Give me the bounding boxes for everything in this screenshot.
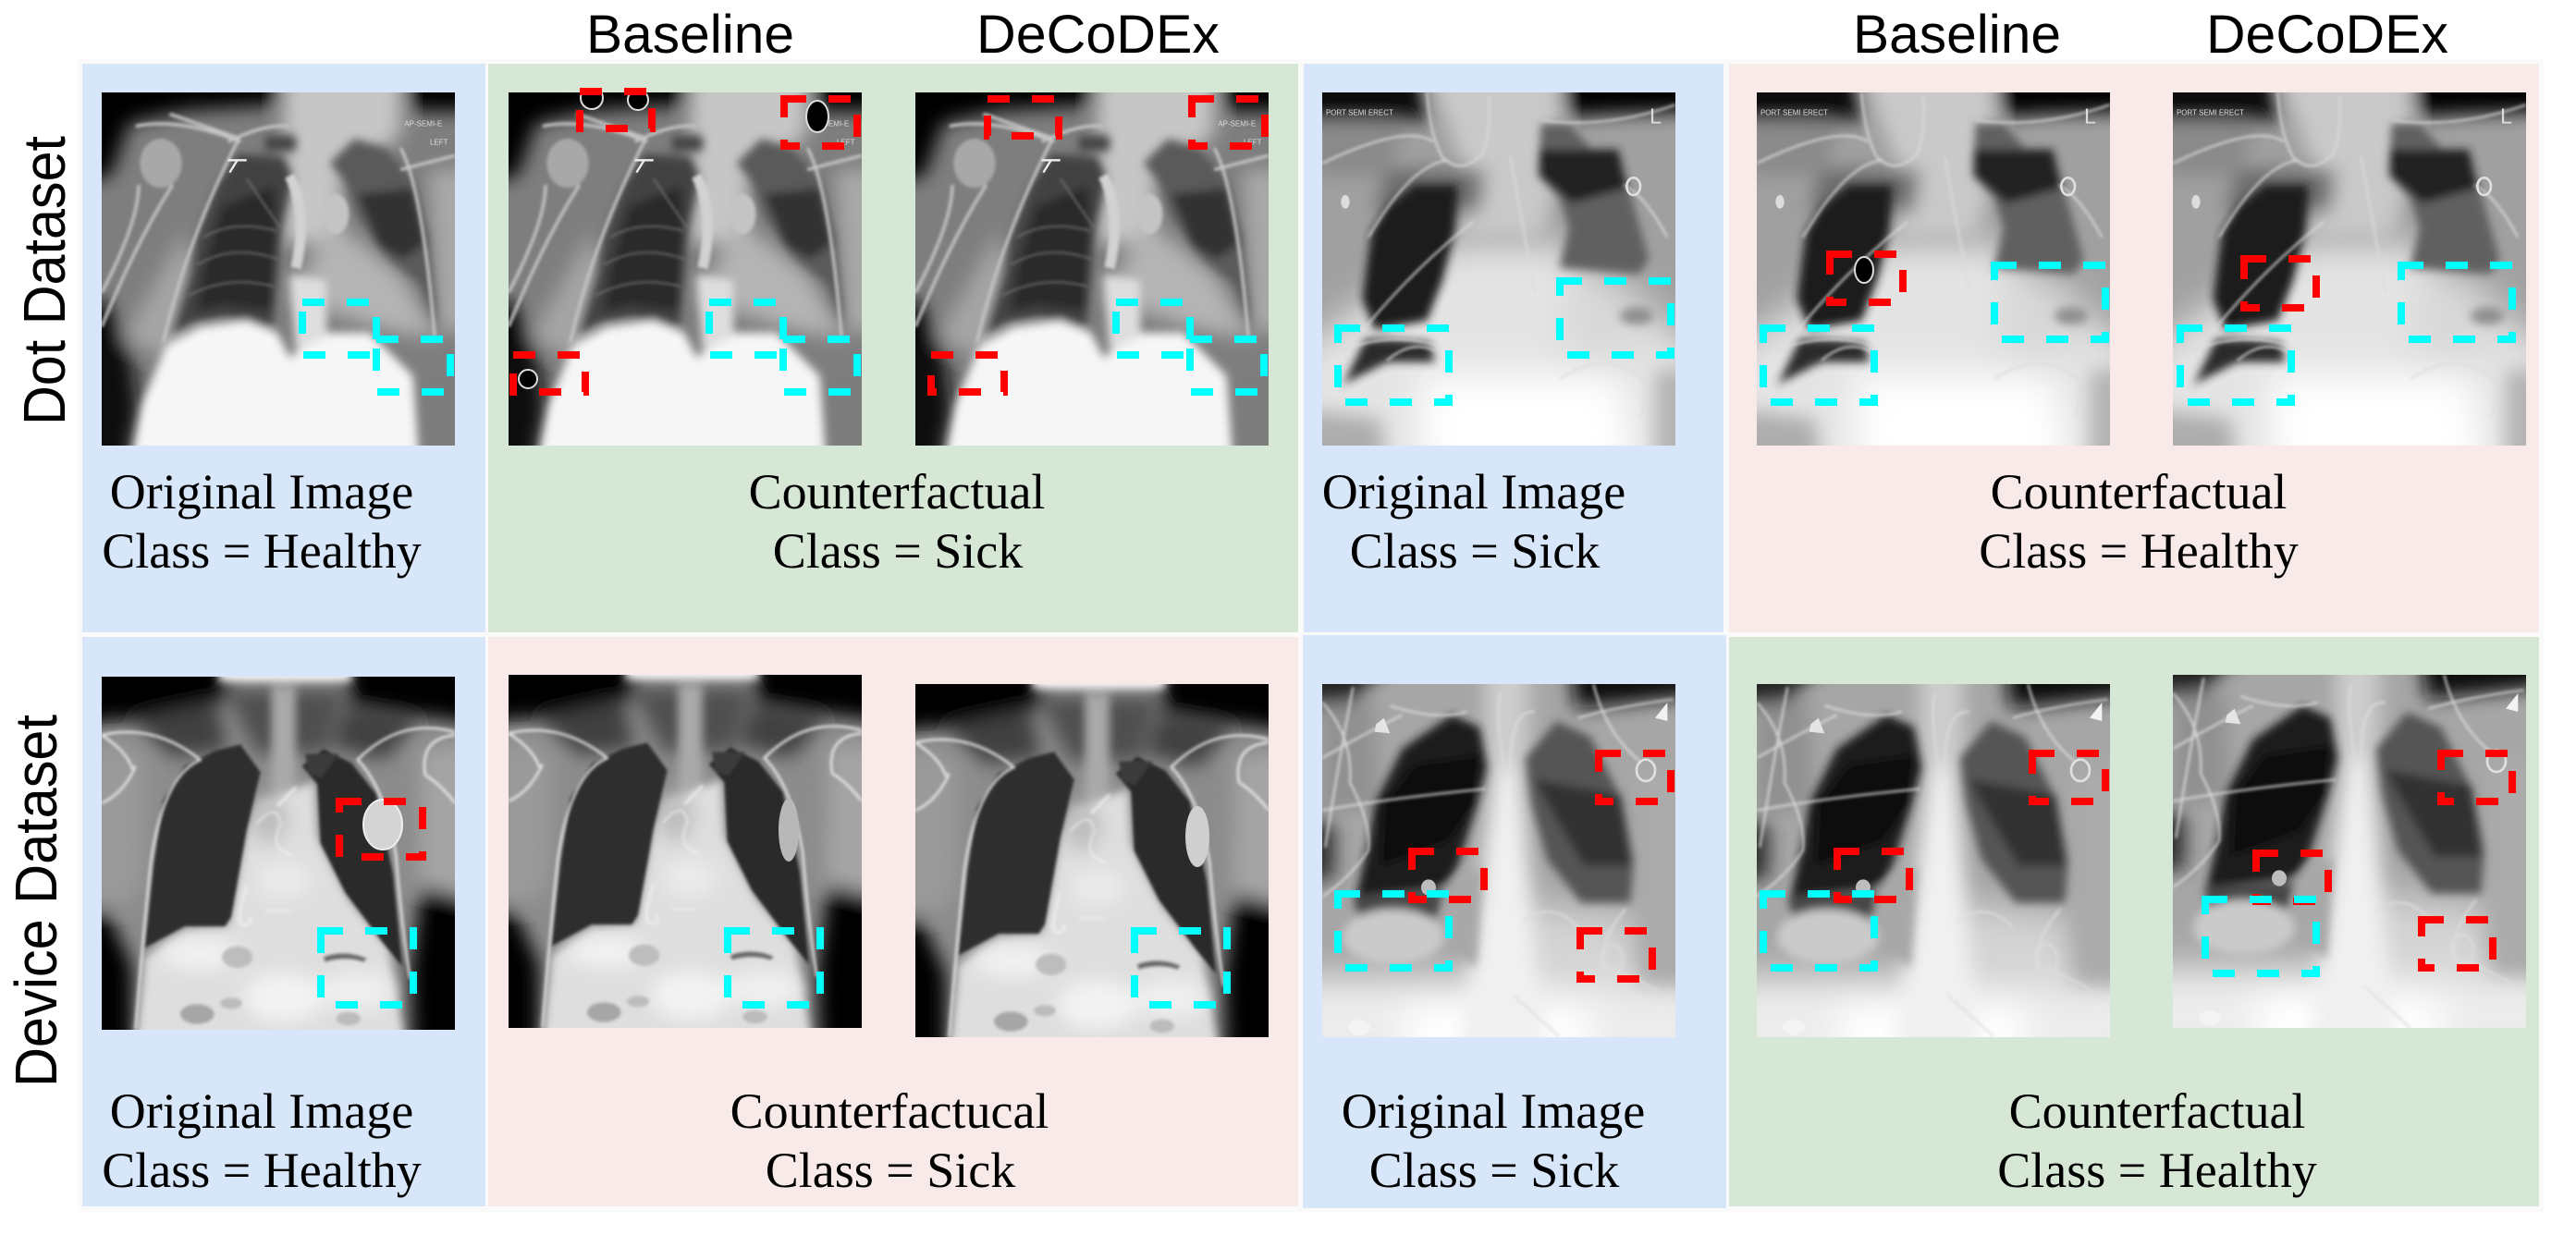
caption: counterfactual healthy: Class = Healthy bbox=[1997, 1143, 2317, 1198]
caption: counterfactual healthy bbox=[1979, 464, 2299, 579]
caption: counterfactual healthy: Counterfactual bbox=[1991, 464, 2287, 520]
caption: original image healthy bbox=[102, 1083, 422, 1198]
x-ray: original healthy chest with device bbox=[102, 677, 455, 1030]
column heading: Baseline, left: Baseline bbox=[586, 5, 794, 65]
x-ray: DeCoDEx counterfactual bbox=[915, 92, 1269, 446]
caption: original image sick: Class = Sick bbox=[1350, 523, 1600, 579]
annotation boxes: cyan regions bbox=[302, 302, 450, 392]
annotation boxes: baseline bbox=[1763, 254, 2105, 402]
x-ray: baseline counterfactual bbox=[1757, 684, 2110, 1037]
panel: dot dataset counterfactual healthy bbox=[1717, 53, 2564, 632]
caption: counterfactual sick: Counterfactucal bbox=[730, 1083, 1049, 1139]
panel: dot dataset original sick bbox=[1282, 53, 1723, 632]
caption: counterfactual sick: Class = Sick bbox=[773, 523, 1023, 579]
caption: counterfactual sick: Counterfactual bbox=[749, 464, 1045, 520]
caption: original image sick bbox=[1342, 1083, 1645, 1198]
x-ray: DeCoDEx counterfactual bbox=[915, 684, 1269, 1037]
caption: counterfactual healthy: Counterfactual bbox=[2009, 1083, 2305, 1139]
caption: counterfactual sick bbox=[730, 1083, 1049, 1198]
caption: original image healthy: Class = Healthy bbox=[102, 523, 422, 579]
caption: original image sick: Original Image bbox=[1342, 1083, 1645, 1139]
x-ray: baseline counterfactual bbox=[509, 675, 862, 1028]
caption: counterfactual sick: Class = Sick bbox=[766, 1143, 1015, 1198]
x-ray: original sick chest bbox=[1322, 684, 1675, 1037]
annotation boxes bbox=[728, 931, 1227, 1005]
x-ray: DeCoDEx counterfactual bbox=[2173, 675, 2526, 1028]
x-ray: baseline counterfactual with dot artifacts bbox=[509, 92, 862, 446]
caption: original image healthy: Original Image bbox=[110, 464, 413, 520]
annotation boxes: DeCoDEx bbox=[2180, 259, 2512, 402]
row label: Dot Dataset: Dot Dataset bbox=[11, 136, 78, 425]
annotation boxes bbox=[1338, 753, 1671, 979]
panel: device dataset original sick bbox=[1282, 635, 1726, 1208]
annotation boxes: cyan regions bbox=[1338, 281, 1671, 402]
annotation boxes bbox=[321, 801, 423, 1005]
caption: counterfactual healthy: Class = Healthy bbox=[1979, 523, 2299, 579]
caption: original image healthy: Original Image bbox=[110, 1083, 413, 1139]
caption: original image sick: Class = Sick bbox=[1369, 1143, 1619, 1198]
annotation boxes: baseline bbox=[513, 92, 857, 392]
caption: original image healthy bbox=[102, 464, 422, 579]
caption: counterfactual sick bbox=[749, 464, 1045, 579]
caption: original image healthy: Class = Healthy bbox=[102, 1143, 422, 1198]
panel: dot dataset counterfactual sick bbox=[469, 53, 1306, 632]
row label: Device Dataset: Device Dataset bbox=[3, 715, 69, 1087]
x-ray: original sick chest bbox=[1322, 92, 1675, 446]
x-ray: baseline counterfactual with dot artifact bbox=[1757, 92, 2110, 446]
annotation boxes: DeCoDEx bbox=[931, 99, 1265, 392]
annotation boxes: DeCoDEx bbox=[2205, 753, 2512, 973]
panel: device dataset original healthy bbox=[62, 637, 493, 1206]
panel: device dataset counterfactual sick bbox=[469, 637, 1306, 1206]
column heading: Baseline, right: Baseline bbox=[1853, 5, 2061, 65]
panel: dot dataset original healthy bbox=[62, 53, 493, 632]
caption: original image sick bbox=[1322, 464, 1625, 579]
x-ray: original healthy chest bbox=[102, 92, 455, 446]
column heading: DeCoDEx, right: DeCoDEx bbox=[2206, 5, 2448, 65]
annotation boxes: baseline bbox=[1763, 753, 2105, 968]
caption: counterfactual healthy bbox=[1997, 1083, 2317, 1198]
caption: original image sick: Original Image bbox=[1322, 464, 1625, 520]
column heading: DeCoDEx, left: DeCoDEx bbox=[976, 5, 1220, 65]
x-ray: DeCoDEx counterfactual bbox=[2173, 92, 2526, 446]
panel: device dataset counterfactual healthy bbox=[1717, 635, 2564, 1206]
